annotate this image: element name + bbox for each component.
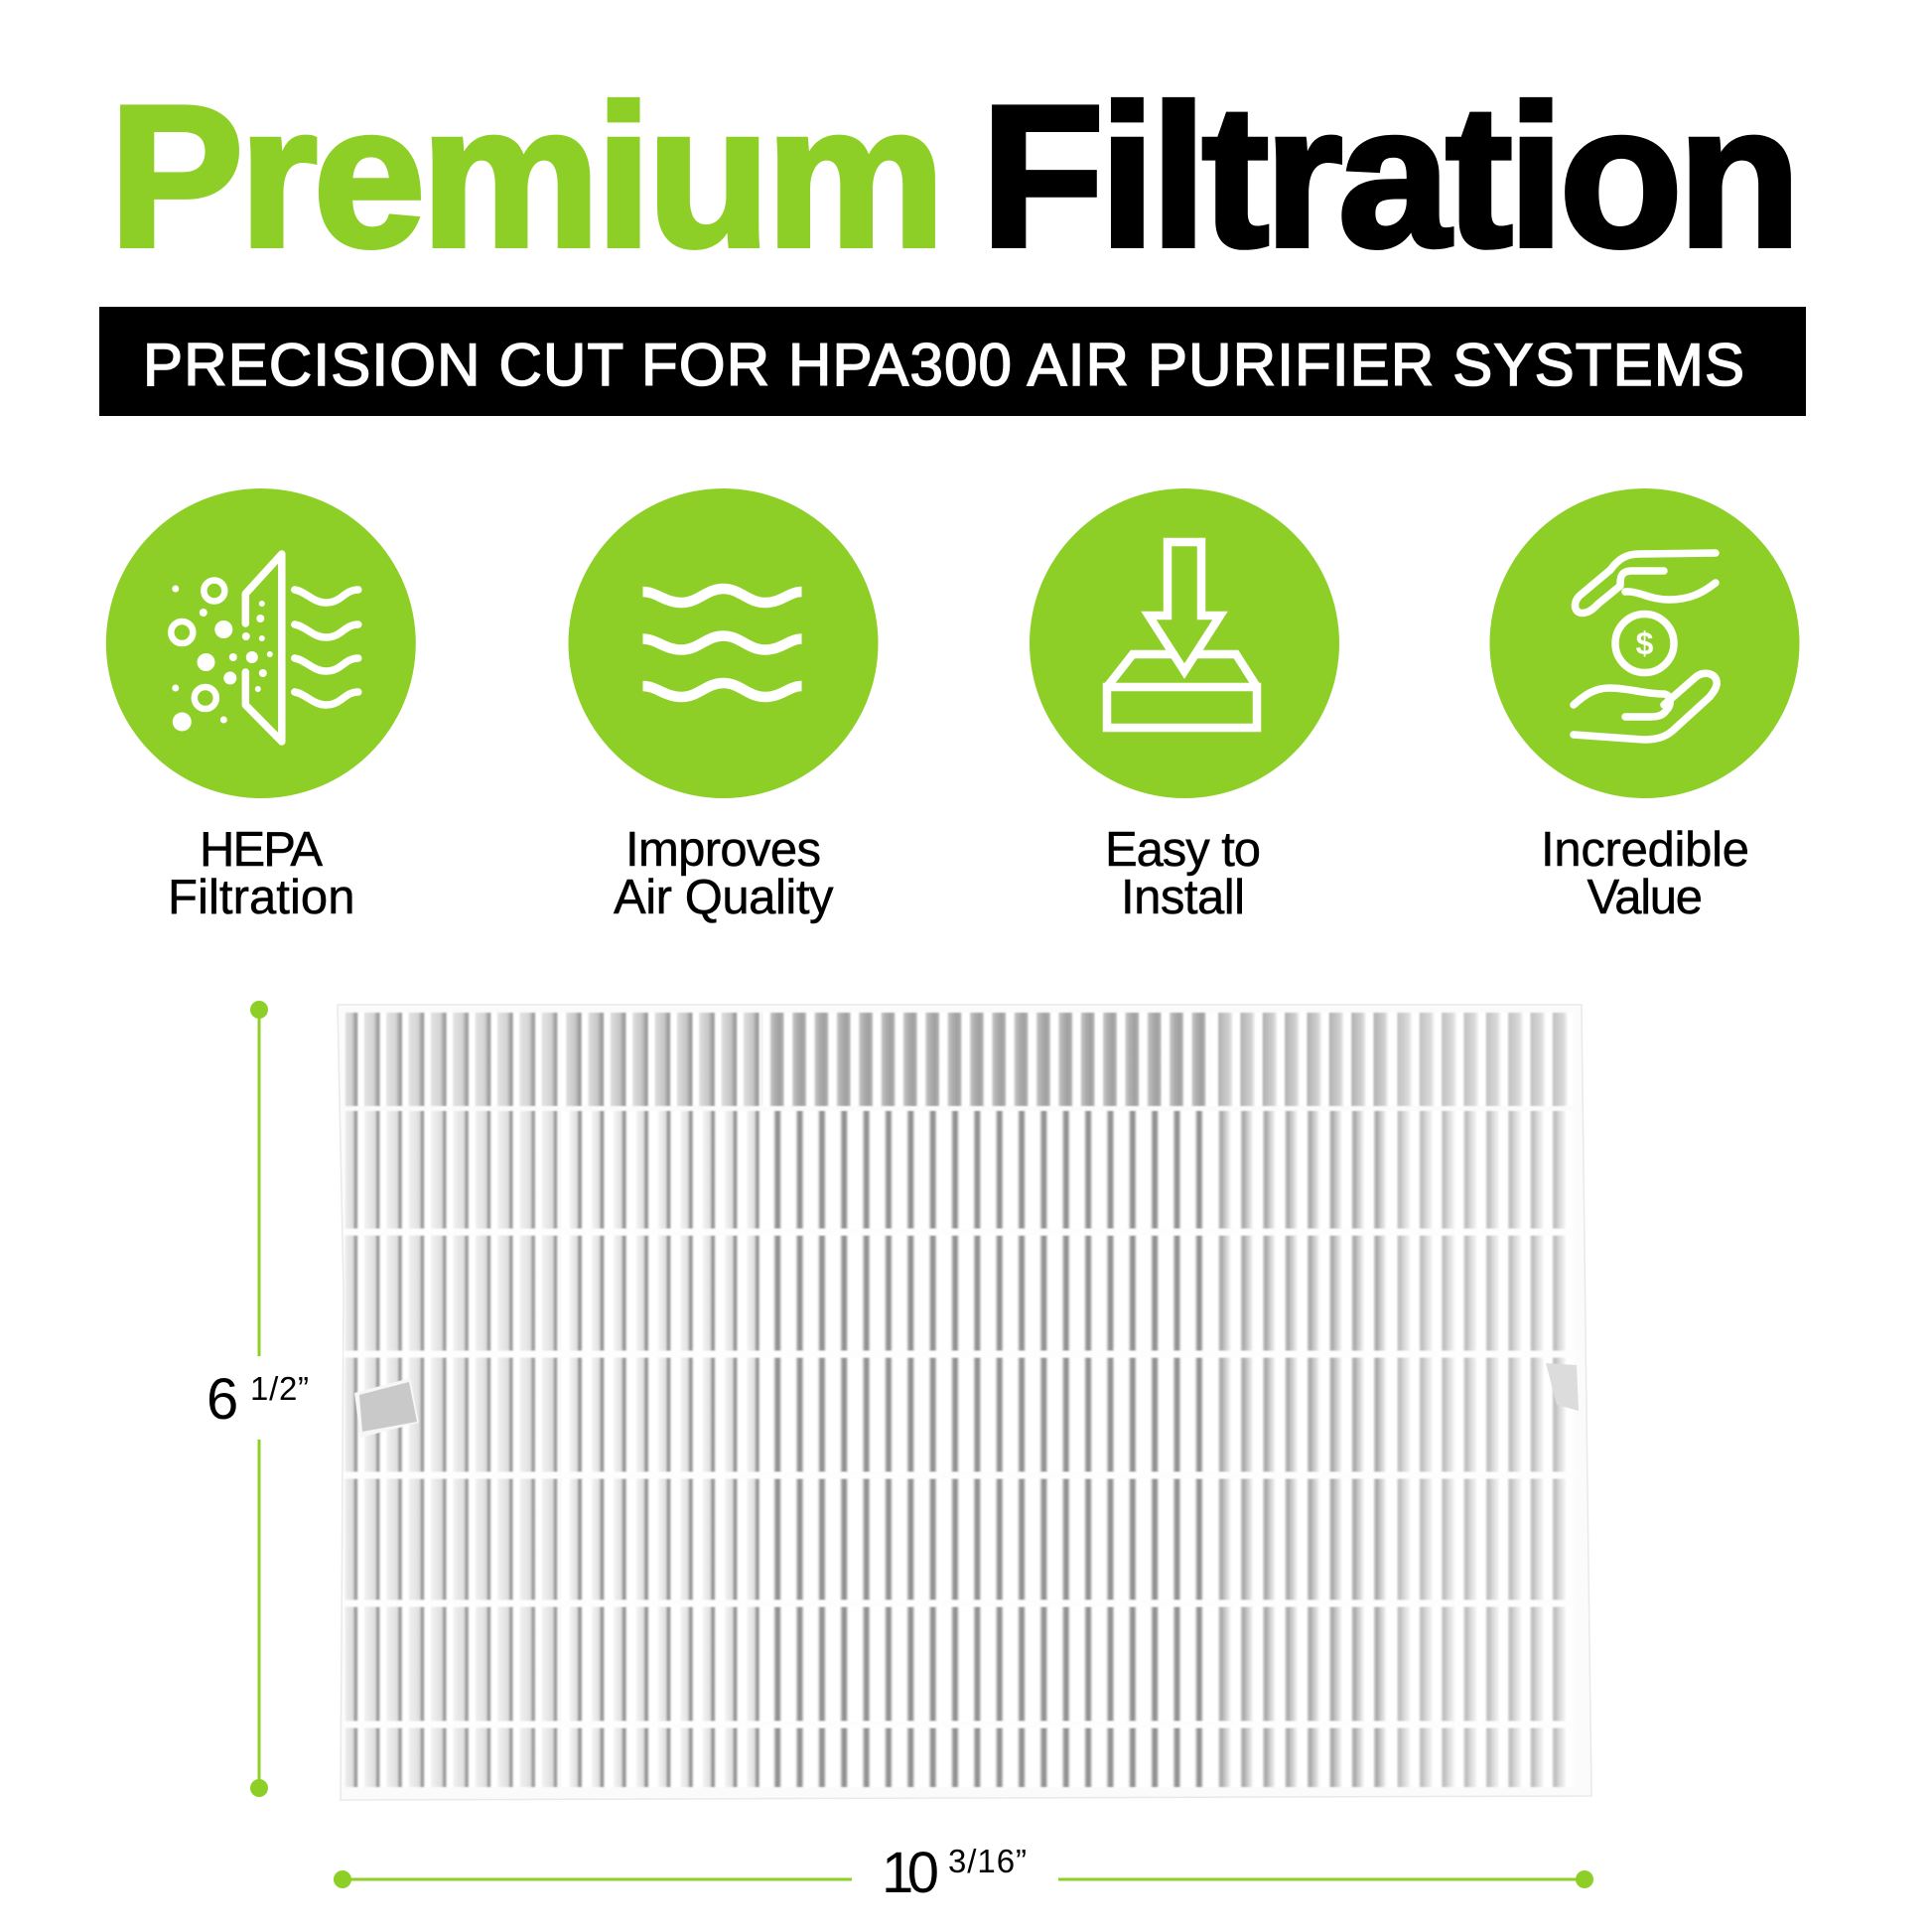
height fraction: 1/2” xyxy=(250,1370,309,1407)
right tab xyxy=(1546,1363,1579,1411)
label xyxy=(1541,823,1749,924)
banner xyxy=(99,307,1806,416)
title word: Filtration: Filtration xyxy=(981,64,1801,290)
title word: Premium: Premium xyxy=(109,64,945,290)
feature: Easy to Install xyxy=(1030,488,1339,924)
label xyxy=(1105,823,1261,924)
width fraction: 3/16” xyxy=(948,1843,1027,1879)
label: Incredible xyxy=(1541,823,1749,877)
dimension: width xyxy=(334,1841,1593,1905)
label: Install xyxy=(1121,871,1245,924)
label xyxy=(168,823,355,924)
icon: hands and coin xyxy=(1489,488,1799,798)
filter frame xyxy=(338,1005,1591,1800)
title xyxy=(109,64,1801,290)
height value: 6 xyxy=(207,1367,238,1432)
left tab xyxy=(354,1378,419,1438)
label: Filtration xyxy=(168,871,355,924)
width line xyxy=(334,1870,1593,1888)
icon: hands and coin: $ xyxy=(1636,625,1654,661)
banner text: PRECISION CUT FOR HPA300 AIR PURIFIER SYSTEMS xyxy=(143,332,1744,398)
label: Value xyxy=(1587,871,1703,924)
pleats xyxy=(344,1013,1577,1787)
icon: filter with particles xyxy=(106,488,416,798)
icon: arrow into box xyxy=(1030,488,1339,798)
width value: 10 xyxy=(882,1841,939,1905)
label: HEPA xyxy=(200,823,323,877)
feature: Incredible Value xyxy=(1489,488,1799,924)
label: Improves xyxy=(625,823,821,877)
label xyxy=(614,823,834,924)
filter photo xyxy=(338,1005,1591,1800)
icon: air waves xyxy=(568,488,878,798)
banner background xyxy=(99,307,1806,416)
label: Air Quality xyxy=(614,871,834,924)
height line xyxy=(250,1001,268,1797)
dimension: height xyxy=(207,1001,309,1797)
feature: Improves Air Quality xyxy=(568,488,878,924)
feature: HEPA Filtration xyxy=(106,488,416,924)
label: Easy to xyxy=(1105,823,1261,877)
